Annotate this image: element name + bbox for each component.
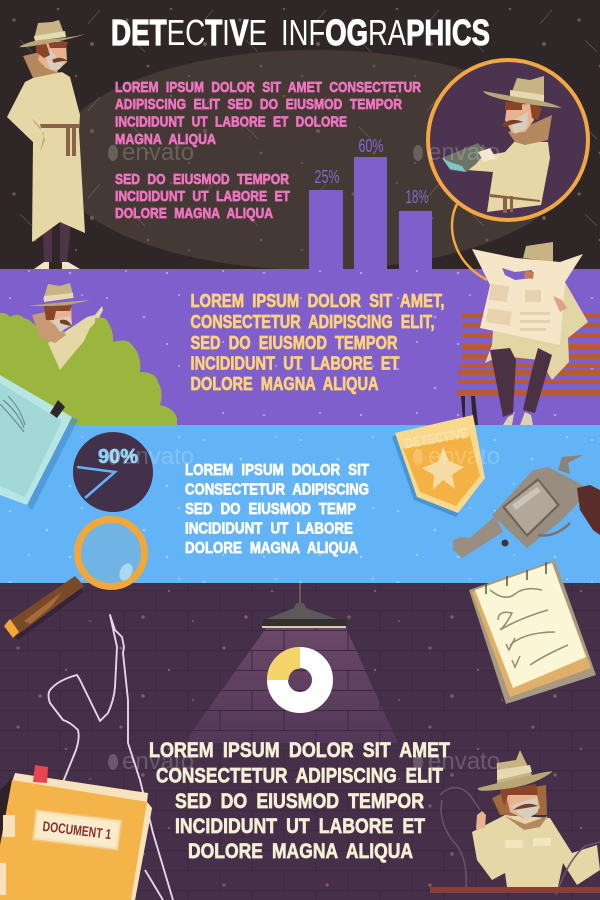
text block: pink intro: LOREM IPSUM DOLOR SIT AMET CONSECTETUR [115,79,421,96]
text block: pink intro: ADIPISCING ELIT SED DO EIUSMOD TEMPOR [115,96,402,113]
icon: bush [0,313,177,425]
icon: ceiling lamp [184,583,398,743]
text block: pink intro: MAGNA ALIQUA [115,131,216,148]
icon: notepad [469,560,596,704]
text block: cream bottom copy: LOREM IPSUM DOLOR SIT AMET [149,739,450,762]
watermarks: envato [122,748,194,775]
text block: pink secondary: SED DO EIUSMOD TEMPOR [115,171,289,188]
text block: pink secondary [115,171,290,222]
title [111,12,490,53]
text block: white blue-band copy: DOLORE MAGNA ALIQUA [185,540,358,557]
icon: detective at table with microphones [430,750,600,895]
bar chart: 18% [406,187,428,207]
title: DETECTIVE [111,12,267,53]
text block: pink intro [115,79,421,148]
icon: detective badge [392,415,485,517]
text block: cream bottom copy: INCIDIDUNT UT LABORE ET [175,815,425,838]
icon: detective hiding in bush [0,283,109,385]
icon: magnifying glass [4,520,144,640]
pie chart: 90% [98,446,138,468]
label: document 1 [32,810,122,850]
icon: detective badge: DETECTIVE [403,425,469,451]
watermarks [108,139,500,775]
text block: cream bottom copy: SED DO EIUSMOD TEMPOR [175,790,424,813]
text block: pink intro: INCIDIDUNT UT LABORE ET DOLORE [115,114,347,130]
text block: cream bottom copy: DOLORE MAGNA ALIQUA [188,840,413,863]
donut chart [267,647,322,702]
icon: document folder [0,765,152,900]
text block: cream bottom copy: CONSECTETUR ADIPISCING ELIT [156,764,443,788]
watermarks: envato [428,748,500,775]
icon: detective with binoculars in circle [428,60,588,220]
watermarks: envato [428,443,500,470]
text block: yellow purple-band copy: LOREM IPSUM DOLOR SIT AMET, [190,291,444,311]
title: INFOGRAPHICS [281,12,490,53]
icon: detective on bench with newspaper [457,242,600,425]
label: document 1: DOCUMENT 1 [42,818,112,842]
text block: white blue-band copy: INCIDIDUNT UT LABORE [185,520,353,538]
panel: top dark band [0,0,600,270]
text block: white blue-band copy: LOREM IPSUM DOLOR SIT [185,462,369,479]
bar chart: 60% [358,136,384,156]
text block: yellow purple-band copy: INCIDIDUNT UT LABORE ET [190,354,400,374]
watermarks: envato [428,139,500,166]
text block: yellow purple-band copy: CONSECTETUR ADIPISCING ELIT, [190,312,434,332]
panel: brick wall band [0,583,600,900]
icon: chalk body outline [48,615,173,900]
bar chart: 25% [314,167,340,187]
panel: purple band [0,269,600,425]
icon: circle connector line [452,204,487,280]
watermarks: envato [122,443,194,470]
text block: yellow purple-band copy: SED DO EIUSMOD TEMPOR [190,333,398,353]
text block: white blue-band copy [185,462,369,557]
icon: revolver [453,455,600,558]
icon: evidence bag [0,375,78,510]
pie chart [73,432,153,512]
text block: yellow purple-band copy [190,291,444,394]
watermarks: envato [122,139,194,166]
text block: yellow purple-band copy: DOLORE MAGNA ALIQUA [190,374,378,394]
text block: cream bottom copy [149,739,450,863]
text block: pink secondary: INCIDIDUNT UT LABORE ET [115,188,290,205]
text block: white blue-band copy: CONSECTETUR ADIPISCING [185,482,369,498]
text block: pink secondary: DOLORE MAGNA ALIQUA [115,205,273,222]
icon: standing detective [7,20,85,269]
bar chart [309,136,432,269]
text block: white blue-band copy: SED DO EIUSMOD TEMP [185,501,356,518]
panel: blue band [0,425,600,583]
